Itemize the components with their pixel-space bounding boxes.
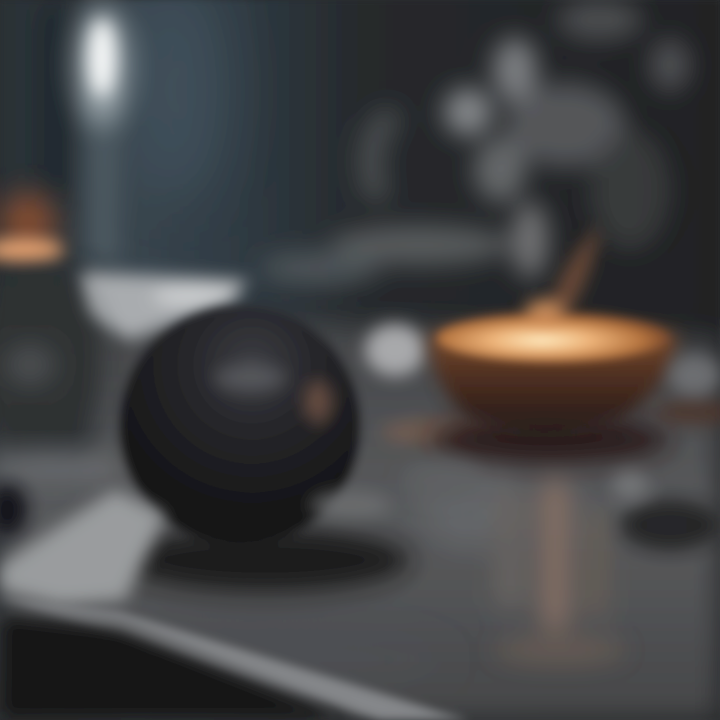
light streak [76,5,128,125]
white band behind sphere [80,272,425,376]
glowing bowl [380,225,720,464]
dark base under sphere [120,528,410,592]
dark sphere [120,305,360,545]
glass stem [495,480,625,664]
table edge [0,598,470,720]
surface highlights [0,355,720,605]
smoke blobs [260,0,690,286]
table surface [0,270,720,720]
left candle [0,192,120,536]
